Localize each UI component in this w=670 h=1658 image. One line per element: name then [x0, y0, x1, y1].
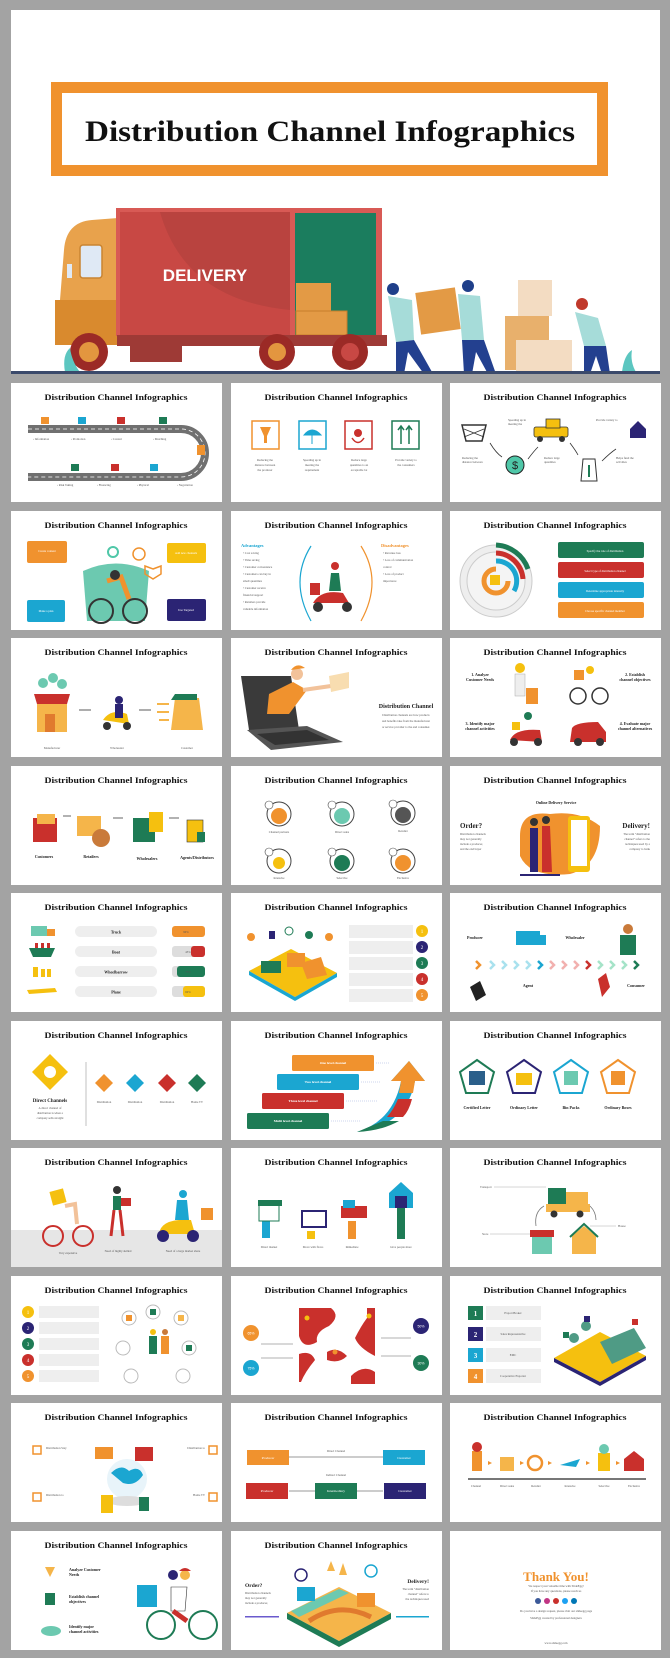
slide 8: laptop delivery: Distribution channels are how products [382, 713, 430, 717]
slide 25: globe: Distribution to [46, 1493, 64, 1497]
slide 2: four icons: meeting the [305, 463, 320, 467]
slide 3: process icons: quantities [544, 460, 556, 464]
slide 13: transport percentages: 90% [183, 930, 189, 934]
slide 21: transport cycle: House [618, 1224, 626, 1228]
slide 2: four icons: distance between [255, 463, 276, 467]
slide 28: steps with cyclist: Needs [69, 1572, 80, 1577]
slide 19: couriers [11, 1148, 222, 1267]
slide 28: steps with cyclist: Establish channel [69, 1594, 100, 1599]
slide 27: icon row: Selective [598, 1484, 610, 1488]
slide 26: channel flow: Direct Channel [327, 1449, 345, 1453]
slide 6: circles + bars: Distribution Channel Infographics [484, 520, 627, 530]
slide 16: direct channels diamonds: Direct Channels [33, 1099, 67, 1104]
slide 13: transport percentages [11, 893, 222, 1012]
slide 5: advantages / disadvantages: • Loss of product [383, 572, 404, 576]
slide 13: transport percentages: 75% [185, 970, 191, 974]
slide 25: globe: Distribution Channel Infographics [44, 1412, 188, 1422]
slide 3: process icons: Reduce large [544, 456, 560, 460]
scooters: › Financing [97, 483, 111, 487]
slide 11: six circles: Direct sales [335, 830, 350, 834]
slide 3: process icons: Reducing the [462, 456, 479, 460]
slide 8: laptop delivery: or service provider to the end consumer. [382, 725, 430, 729]
scooters: › Information [33, 437, 50, 441]
slide 5: advantages / disadvantages: • Retailers provide [243, 600, 266, 604]
slide 21: transport cycle [450, 1148, 661, 1267]
slide 13: transport percentages: Boat [112, 950, 121, 954]
slide 10: isometric chain: Wholesalers [137, 856, 158, 861]
slide 17: levels staircase: Three level channel [288, 1099, 318, 1103]
slide 19: couriers: Need of a large market share [166, 1249, 201, 1253]
social icons [535, 1598, 577, 1604]
slide 24: numbered squares isometric: Distribution Channel Infographics [484, 1285, 627, 1295]
thank you heading [523, 1569, 589, 1594]
slide 29: isometric order delivery: Distribution channels [245, 1591, 272, 1595]
slide 2: four icons: Reducing the [257, 458, 274, 462]
slide 7: manufacturer flow: Distribution Channel Infographics [44, 647, 188, 657]
slide 13: transport percentages: Truck [111, 930, 122, 934]
slide 20: pillars [231, 1148, 442, 1267]
slide 9: four steps: Distribution Channel Infographics [484, 647, 627, 657]
slide 10: isometric chain: Customers [35, 854, 54, 859]
thank you heading: We respect your valuable time with SlideEgg! [528, 1584, 584, 1588]
slide 12: order delivery: and the end buyer [460, 847, 481, 851]
slide 27: icon row: Retailer [531, 1484, 541, 1488]
road [28, 429, 205, 477]
slide 22: numbered list with icons: 3 [27, 1343, 30, 1348]
slide 19: couriers: Very expensive [59, 1251, 78, 1255]
slide 23: red map: Distribution Channel Infographics [264, 1285, 408, 1295]
slide 16: direct channels diamonds: distribution is when a [37, 1111, 64, 1115]
slide 7: manufacturer flow: Manufacturer [44, 746, 60, 750]
slide 17: levels staircase: Multi level channel [274, 1119, 302, 1123]
slide 2: four icons: quantities to an [350, 463, 369, 467]
slide 5: advantages / disadvantages: control [383, 565, 392, 569]
title: Distribution Channel Infographics [85, 115, 575, 148]
slide 2: four icons: Speeding up in [303, 458, 321, 462]
slide 23: red map: 50% [417, 1324, 425, 1328]
slide 3: process icons: Provide variety to [596, 418, 618, 422]
slide 4: bike plan: Create content [38, 549, 56, 553]
slide 8: laptop delivery: Distribution Channel Infographics [264, 647, 408, 657]
slide 26: channel flow: Customer [397, 1456, 412, 1460]
slide 18: pentagons: Ordinary Boxes [604, 1105, 632, 1110]
slide 5: advantages / disadvantages: Advantages [241, 543, 264, 548]
slide 27: icon row: Intensive [564, 1484, 576, 1488]
slide 3: process icons: activities [616, 460, 628, 464]
slide 9: four steps: 4. Evaluate major [620, 721, 650, 726]
slide 24: numbered squares isometric: 4 [474, 1373, 478, 1381]
slide 12: order delivery: The term "distribution [623, 832, 650, 836]
slide 30: thank you: www.slideegg.com [545, 1641, 568, 1645]
slide 12: order delivery: Distribution channels [460, 832, 487, 836]
slide 11: six circles: Selective [336, 876, 348, 880]
slide 17: levels staircase: Distribution Channel Infographics [264, 1030, 408, 1040]
slide 18: pentagons [450, 1021, 661, 1140]
slide 5: advantages / disadvantages: • Customer convenience [243, 565, 273, 569]
slide 4: bike plan: Use Targeted [178, 608, 194, 612]
slide 9: four steps: 1. Analyze [471, 672, 489, 677]
scooters: › Contact [111, 437, 122, 441]
slide 7: manufacturer flow: Wholesaler [110, 746, 124, 750]
slide 6: circles + bars: Specify the role of distribution [587, 549, 624, 553]
slide 16: direct channels diamonds: Distribution Channel Infographics [44, 1030, 188, 1040]
slide 15: chevron flow: Producer [467, 935, 483, 940]
slide 5: advantages / disadvantages: • Customers can buy in [243, 572, 271, 576]
slide 29: isometric order delivery: may not generally [245, 1596, 267, 1600]
slide 16: direct channels diamonds: A direct channel of [39, 1106, 61, 1110]
slide 26: channel flow [231, 1403, 442, 1522]
slide 27: icon row: Channel [471, 1484, 481, 1488]
slide 5: advantages / disadvantages: financial support [243, 593, 263, 597]
slide 20: pillars: Direct market [261, 1245, 277, 1249]
scooters: › Negotiation [177, 483, 193, 487]
slide 14: isometric list: 1 [421, 930, 424, 935]
slide 27: icon row [450, 1403, 661, 1522]
slide 24: numbered squares isometric [450, 1276, 661, 1395]
slide 15: chevron flow: Consumer [627, 983, 645, 988]
slide 2: four icons: the consumers [397, 463, 415, 467]
slide 11: six circles [231, 766, 442, 885]
slide 14: isometric list: Distribution Channel Infographics [264, 902, 408, 912]
slide 15: chevron flow: Distribution Channel Infographics [484, 902, 627, 912]
slide 14: isometric list: 5 [421, 994, 424, 999]
slide 14: isometric list: 4 [421, 978, 424, 983]
slide 29: isometric order delivery: the techniques used [406, 1597, 429, 1601]
slide 2: four icons: requirement [305, 468, 319, 472]
slide 10: isometric chain [11, 766, 222, 885]
slide 9: four steps: 3. Identify major [466, 721, 495, 726]
slide 25: globe: Distribution to [187, 1446, 205, 1450]
slide 18: pentagons: Certified Letter [464, 1105, 491, 1110]
slide 29: isometric order delivery: Order? [245, 1583, 263, 1589]
slide 9: four steps: 2. Establish [625, 672, 646, 677]
slide 11: six circles: Intensive [274, 876, 285, 880]
slide 9: four steps: channel activities [465, 726, 495, 731]
slide 6: circles + bars: Select type of distribution channel [584, 569, 626, 573]
scooters [33, 417, 205, 487]
slide 10: isometric chain: Agents/Distributors [180, 855, 214, 860]
slide 10: isometric chain: Retailers [83, 854, 99, 859]
slide 3: process icons: meeting the [508, 422, 523, 426]
slide 19: couriers: Need of highly skilled [105, 1249, 132, 1253]
slide 16: direct channels diamonds: Distribution [97, 1100, 112, 1104]
slide 4: bike plan [11, 511, 222, 630]
slide 5: advantages / disadvantages [231, 511, 442, 630]
slide 23: red map: 75% [247, 1366, 255, 1370]
slide 26: channel flow: Producer [261, 1489, 274, 1493]
slide 28: steps with cyclist [11, 1531, 222, 1650]
slide 14: isometric list: 2 [421, 946, 424, 951]
slide 9: four steps: channel objectives [619, 677, 651, 682]
slide 13: transport percentages: Wheelbarrow [104, 970, 128, 974]
slide 12: order delivery: Order? [460, 822, 483, 830]
slide 26: channel flow: Producer [262, 1456, 275, 1460]
scooters: › Promotion [71, 437, 86, 441]
slide 16: direct channels diamonds: Home TV [191, 1100, 204, 1104]
slide 29: isometric order delivery: Distribution Channel Infographics [264, 1540, 408, 1550]
slide 6: circles + bars [450, 511, 661, 630]
slide 26: channel flow: Intermediary [327, 1489, 345, 1493]
slide 13: transport percentages: Plane [111, 990, 121, 994]
slide 22: numbered list with icons: Distribution Channel Infographics [44, 1285, 188, 1295]
slide 16: direct channels diamonds [11, 1021, 222, 1140]
slide 16: direct channels diamonds: Distribution [128, 1100, 143, 1104]
slide 2: four icons: acceptable lot [351, 468, 367, 472]
slide 5: advantages / disadvantages: • Customer receive [243, 586, 267, 590]
slide 16: direct channels diamonds: Distribution [160, 1100, 175, 1104]
slide 13: transport percentages: Distribution Channel Infographics [44, 902, 188, 912]
slide 3: process icons: Speeding up in [508, 418, 526, 422]
slide 26: channel flow: Customer [398, 1489, 413, 1493]
slide 30: thank you: Do you have a design request, please visit our slideegg page [520, 1609, 593, 1614]
slide 13: transport percentages: 60% [185, 990, 191, 994]
slide 2: four icons: Provide variety to [395, 458, 417, 462]
slide 4: bike plan: Make a plan [39, 609, 54, 613]
slide 5: advantages / disadvantages: • Loss of communication [383, 558, 414, 562]
title frame [56, 88, 602, 170]
slide 25: globe [11, 1403, 222, 1522]
slide 6: circles + bars: Determine appropriate intensity [586, 589, 625, 593]
slide 27: icon row: Direct sales [500, 1484, 515, 1488]
slide 15: chevron flow: Agent [523, 983, 534, 988]
slide 16: direct channels diamonds: company sells straight [37, 1116, 64, 1120]
slide 11: six circles: Retailer [398, 829, 408, 833]
slide 14: isometric list: 3 [421, 962, 424, 967]
slide 12: order delivery: Distribution Channel Infographics [484, 775, 627, 785]
slide 3: process icons: $ [512, 460, 518, 472]
slide 12: order delivery: may not generally [460, 837, 482, 841]
slide 20: pillars: Immediate [346, 1245, 359, 1249]
slide 2: four icons [231, 383, 442, 502]
slide 6: circles + bars: Choose specific channel member [585, 609, 625, 613]
slide 26: channel flow: Distribution Channel Infographics [264, 1412, 408, 1422]
slide 21: transport cycle: Distribution Channel Infographics [484, 1157, 627, 1167]
slide 12: order delivery: Online Delivery Service [536, 800, 576, 805]
slide 27: icon row: Exclusive [628, 1484, 641, 1488]
slide 2: four icons: the producer [257, 468, 273, 472]
slide 24: numbered squares isometric: 2 [474, 1331, 478, 1339]
slide 20: pillars: Move with flows [303, 1245, 324, 1249]
slide 22: numbered list with icons: 4 [27, 1359, 30, 1364]
slide 28: steps with cyclist: channel activities [69, 1629, 99, 1634]
slide 11: six circles: Exclusive [397, 876, 410, 880]
slide 28: steps with cyclist: objectives [69, 1599, 86, 1604]
hero slide [11, 10, 660, 374]
slide 22: numbered list with icons [11, 1276, 222, 1395]
slide 15: chevron flow: Wholesaler [565, 935, 585, 940]
slide 19: couriers: Distribution Channel Infographics [44, 1157, 188, 1167]
slide 20: pillars: Give people more [390, 1245, 412, 1249]
slide 8: laptop delivery: Distribution Channel [379, 704, 434, 710]
slide 18: pentagons: Bin Packs [562, 1105, 580, 1110]
slide 5: advantages / disadvantages: small quantities [243, 579, 263, 583]
slide 12: order delivery: Delivery! [622, 822, 650, 830]
DELIVERY text: DELIVERY [163, 266, 248, 285]
slide 20: pillars: Distribution Channel Infographics [264, 1157, 408, 1167]
slide 3: process icons: distance between [462, 460, 483, 464]
thank you heading: Thank You! [523, 1569, 589, 1584]
slide 2: four icons: Distribution Channel Infographics [264, 392, 408, 402]
slide 5: advantages / disadvantages: importance [383, 579, 397, 583]
slide 2: four icons: Reduce large [351, 458, 368, 462]
slide 12: order delivery [450, 766, 661, 885]
slide 24: numbered squares isometric: EMC [510, 1353, 516, 1357]
scooters: › Physical [137, 483, 149, 487]
slide 30: thank you: SlideEgg created by professional designers [530, 1616, 583, 1620]
slide 7: manufacturer flow: Customer [181, 746, 193, 750]
slide 10: isometric chain: Distribution Channel Infographics [44, 775, 188, 785]
slide 28: steps with cyclist: Identify major [69, 1624, 94, 1629]
slide 24: numbered squares isometric: 1 [474, 1310, 478, 1318]
slide 17: levels staircase: One level channel [320, 1061, 346, 1065]
slide 21: transport cycle: Store [482, 1232, 489, 1236]
slide 22: numbered list with icons: 2 [27, 1327, 30, 1332]
slide 28: steps with cyclist: Analyze Customer [69, 1567, 101, 1572]
slide 17: levels staircase [231, 1021, 442, 1140]
delivery truck illustration [55, 208, 387, 372]
slide 29: isometric order delivery: Delivery! [407, 1579, 429, 1585]
slide 12: order delivery: techniques used by a [625, 842, 651, 846]
slide 24: numbered squares isometric: 3 [474, 1352, 478, 1360]
slide 15: chevron flow [450, 893, 661, 1012]
slide 11: six circles: Distribution Channel Infographics [264, 775, 408, 785]
slide 9: four steps: channel alternatives [618, 726, 653, 731]
slide 1: road map: Distribution Channel Infographics [44, 392, 188, 402]
slide 25: globe: Home TV [193, 1493, 206, 1497]
slide 9: four steps: Customer Needs [466, 677, 494, 682]
slide 5: advantages / disadvantages: • Cost saving [243, 551, 259, 555]
slide 21: transport cycle: Transport [480, 1185, 492, 1189]
slide 12: order delivery: channel" refers to the [624, 837, 651, 841]
slide 29: isometric order delivery: The term "distribution [402, 1587, 429, 1591]
slide 12: order delivery: company to bank [629, 847, 650, 851]
slide 18: pentagons: Ordinary Letter [510, 1105, 538, 1110]
slide 3: process icons: Helps fund the [616, 456, 634, 460]
slide 4: bike plan: Add new channels [175, 551, 198, 555]
slide 5: advantages / disadvantages: Distribution Channel Infographics [264, 520, 408, 530]
slide 24: numbered squares isometric: Cooperative Exporter [500, 1374, 526, 1378]
slide 9: four steps [450, 638, 661, 757]
slide 28: steps with cyclist: Distribution Channel Infographics [44, 1540, 188, 1550]
slide 1: road map [11, 383, 222, 502]
slide 14: isometric list [231, 893, 442, 1012]
slide 26: channel flow: Indirect Channel [326, 1473, 346, 1477]
slide 29: isometric order delivery: channel" refers to [408, 1592, 429, 1596]
slide 29: isometric order delivery: include a producer, [245, 1601, 268, 1606]
slide 13: transport percentages: 45% [185, 950, 191, 954]
slide 5: advantages / disadvantages: Disadvantages [381, 543, 409, 548]
thank you heading: If you have any questions, please reach us [531, 1589, 582, 1594]
slide 17: levels staircase: Two level channel [305, 1080, 331, 1084]
slide 12: order delivery: include a producer, [460, 842, 483, 847]
slide 27: icon row: Distribution Channel Infographics [484, 1412, 627, 1422]
slide 24: numbered squares isometric: Sales Representative [501, 1332, 526, 1336]
slide 4: bike plan: Distribution Channel Infographics [44, 520, 188, 530]
slide 5: advantages / disadvantages: • Time saving [243, 558, 260, 562]
slide 11: six circles: Channel partners [269, 830, 290, 834]
slide 3: process icons: Distribution Channel Infographics [484, 392, 627, 402]
slide 22: numbered list with icons: 1 [27, 1311, 30, 1316]
slide 25: globe: Distribution Stay [46, 1446, 67, 1450]
slide 5: advantages / disadvantages: valuable information [243, 607, 269, 611]
slide 5: advantages / disadvantages: • Revenue loss [383, 551, 402, 555]
slide 30: thank you [450, 1531, 661, 1650]
slide 23: red map: 30% [417, 1362, 425, 1366]
slide 8: laptop delivery: and benefits take from the manufacturer [382, 719, 430, 723]
slide 22: numbered list with icons: 5 [27, 1375, 30, 1380]
slide 23: red map: 65% [247, 1332, 255, 1336]
slide 3: process icons [450, 383, 661, 502]
scooters: › Risk Taking [57, 483, 74, 487]
slide 23: red map [231, 1276, 442, 1395]
slide 7: manufacturer flow [11, 638, 222, 757]
slide 8: laptop delivery [231, 638, 442, 757]
slide 18: pentagons: Distribution Channel Infographics [484, 1030, 627, 1040]
slide 29: isometric order delivery [231, 1531, 442, 1650]
workers carrying boxes [387, 280, 636, 374]
scooters: › Matching [153, 437, 167, 441]
slide 24: numbered squares isometric: Export Broker [504, 1311, 522, 1315]
